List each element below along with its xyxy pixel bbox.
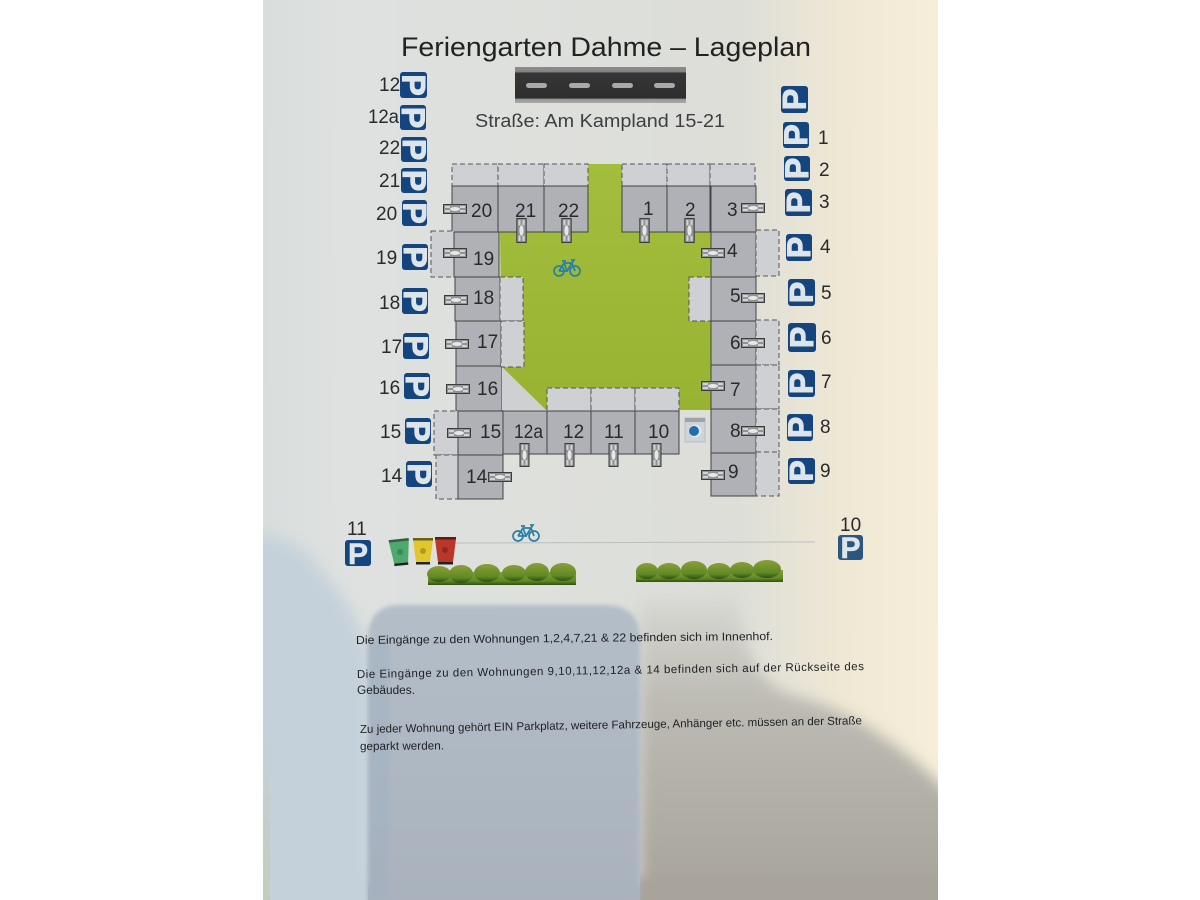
icon: bicycle on back path <box>513 525 539 541</box>
parking 3: P <box>780 192 816 213</box>
site plan <box>431 164 779 499</box>
parking 7: P <box>784 373 820 394</box>
bottom row apartments <box>503 388 679 454</box>
parking 9: 9 <box>820 461 831 482</box>
text block: parking rule: Zu jeder Wohnung gehört EIN Parkplatz, weitere Fahrzeuge, Anhänger etc. müssen an der Straße <box>360 715 862 736</box>
text block: courtyard entrances: Die Eingänge zu den Wohnungen 1,2,4,7,21 & 22 befinden sich im Innenhof. <box>356 631 773 647</box>
left column apartments <box>431 231 546 499</box>
apartment numbers: 5 <box>730 286 741 307</box>
parking 22: 22 <box>379 138 400 159</box>
red bin <box>435 537 456 564</box>
parking signs right <box>776 86 832 484</box>
parking 1: P <box>778 124 814 146</box>
parking 22 <box>379 137 432 162</box>
apartment numbers: 9 <box>728 462 739 483</box>
parking 15: 15 <box>380 422 401 443</box>
parking 19 <box>376 244 433 270</box>
parking 19: P <box>397 246 433 268</box>
street name: Straße: Am Kampland 15-21 <box>475 111 725 131</box>
apartment numbers: 20 <box>471 201 492 222</box>
right column apartments <box>689 230 779 496</box>
green courtyard <box>500 164 711 410</box>
apartment numbers: 18 <box>473 288 494 309</box>
apartment numbers: 7 <box>730 380 741 401</box>
apartment numbers: 6 <box>730 333 741 354</box>
parking 12: 12 <box>379 75 400 96</box>
parking signs left <box>368 72 437 487</box>
parking 18: 18 <box>379 293 400 314</box>
parking 6: P <box>784 327 820 348</box>
green bin <box>389 538 411 566</box>
parking 10 <box>838 515 863 565</box>
parking 4 <box>781 234 831 261</box>
icon: washing machine <box>685 418 705 442</box>
apartment numbers: 17 <box>477 332 498 353</box>
parking 10: P <box>840 532 861 565</box>
parking 6: 6 <box>821 328 832 349</box>
parking 14: 14 <box>381 466 403 487</box>
text block: rear entrances: Die Eingänge zu den Wohnungen 9,10,11,12,12a & 14 befinden sich auf der Rückseite des <box>357 661 864 681</box>
text block: parking rule: geparkt werden. <box>360 740 444 753</box>
apartment numbers: 21 <box>515 201 536 222</box>
parking 21 <box>379 168 432 193</box>
apartment numbers: 22 <box>558 201 579 222</box>
apartment numbers: 4 <box>727 241 738 262</box>
apartment numbers: 3 <box>727 200 738 221</box>
parking 9: P <box>784 460 820 482</box>
apartment numbers: 12a <box>514 422 543 443</box>
parking 12a: 12a <box>368 107 399 128</box>
parking 20 <box>376 200 432 226</box>
parking 9 <box>784 458 831 484</box>
apartment numbers: 15 <box>480 422 501 443</box>
apartment numbers: 2 <box>685 200 696 221</box>
parking 5 <box>784 279 832 306</box>
parking 21: P <box>396 170 432 191</box>
apartment numbers: 11 <box>604 422 624 443</box>
hedge left <box>427 563 576 585</box>
parking 18: P <box>397 290 433 312</box>
parking 10: 10 <box>840 515 861 536</box>
parking 8 <box>782 414 831 441</box>
parking 11: P <box>348 538 368 571</box>
parking 16 <box>379 373 435 399</box>
parking 12a <box>368 105 431 130</box>
parking 14 <box>381 461 437 487</box>
parking 17 <box>381 333 434 359</box>
parking 18 <box>379 288 433 314</box>
parking 12 <box>379 72 432 98</box>
parking 7: 7 <box>821 372 832 393</box>
parking 12: P <box>396 74 432 96</box>
yellow bin <box>413 538 433 564</box>
parking 2 <box>779 156 830 181</box>
top terraces <box>452 164 755 186</box>
top row apartments <box>452 186 756 232</box>
hedge right <box>636 560 783 582</box>
apartment numbers: 10 <box>648 422 669 443</box>
text block: rear entrances <box>357 661 864 697</box>
apartment numbers: 16 <box>477 379 498 400</box>
parking 17: P <box>398 335 434 357</box>
parking 14: P <box>401 463 437 485</box>
parking 19: 19 <box>376 248 397 269</box>
text block: rear entrances: Gebäudes. <box>357 685 415 697</box>
parking 4: P <box>781 237 817 258</box>
parking 5: P <box>784 282 820 303</box>
icon: waste bins <box>389 537 456 566</box>
icon: bicycle in courtyard <box>554 260 580 276</box>
parking 15: P <box>400 420 436 442</box>
parking 1 <box>778 122 829 149</box>
road graphic <box>515 67 686 103</box>
back path line <box>455 542 815 543</box>
parking 2: P <box>779 158 815 179</box>
parking 16: 16 <box>379 378 400 399</box>
apartment numbers: 1 <box>643 199 654 220</box>
paper background <box>250 0 955 900</box>
parking 8: 8 <box>820 417 831 438</box>
apartment numbers: 8 <box>730 421 741 442</box>
parking 3 <box>780 189 830 216</box>
title: Feriengarten Dahme – Lageplan <box>401 32 811 62</box>
parking 8: P <box>782 417 818 438</box>
apartment numbers: 14 <box>466 467 488 488</box>
parking 16: P <box>399 375 435 397</box>
apartment numbers <box>466 199 741 488</box>
apartment numbers: 19 <box>473 249 494 270</box>
parking unnumbered: P <box>776 89 812 110</box>
parking 20: 20 <box>376 204 397 225</box>
apartment numbers: 12 <box>563 422 584 443</box>
parking 5: 5 <box>821 283 832 304</box>
parking 6 <box>784 323 832 352</box>
parking 17: 17 <box>381 337 402 358</box>
parking 11 <box>345 519 371 571</box>
parking 1: 1 <box>818 128 829 149</box>
parking 22: P <box>396 139 432 160</box>
parking 15 <box>380 418 436 444</box>
parking 21: 21 <box>379 171 400 192</box>
parking 2: 2 <box>819 160 830 181</box>
parking 4: 4 <box>820 237 831 258</box>
cars <box>444 204 764 482</box>
parking 11: 11 <box>347 519 367 540</box>
parking 12a: P <box>395 107 431 128</box>
parking 20: P <box>396 202 432 224</box>
parking 3: 3 <box>819 192 830 213</box>
parking 7 <box>784 370 832 397</box>
text block: parking rule <box>360 715 862 753</box>
